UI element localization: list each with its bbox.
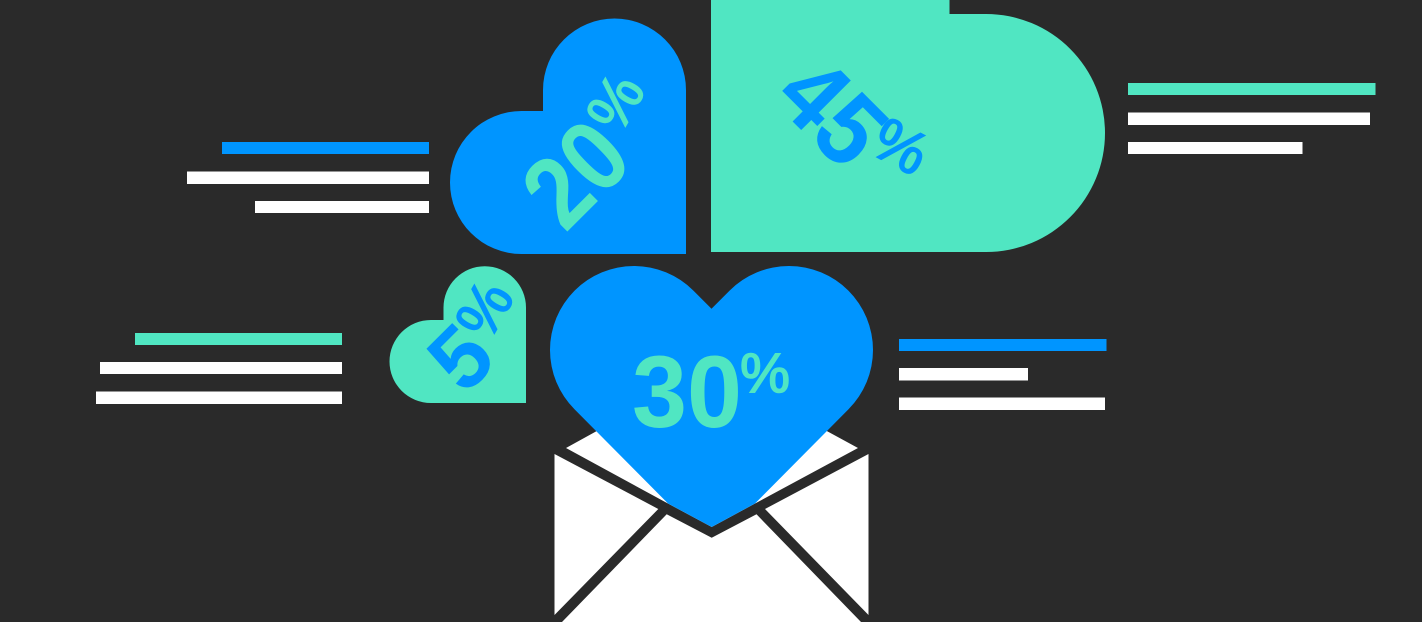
panel: 20 percent heart: % xyxy=(573,62,658,142)
panel: 20 percent heart: 20 xyxy=(500,98,651,249)
panel: 45 percent shape xyxy=(711,0,1105,252)
text block: 45 percent placeholder lines xyxy=(1128,83,1376,154)
panel: 30 percent heart: % xyxy=(740,341,790,404)
panel: 5 percent heart: 5 xyxy=(408,305,513,410)
icon: envelope xyxy=(554,368,868,622)
panel: 5 percent heart: % xyxy=(442,269,527,349)
panel: 45 percent shape: % xyxy=(861,104,940,189)
text block: 30 percent placeholder lines xyxy=(899,339,1106,410)
panel: 5 percent heart xyxy=(390,266,527,410)
panel: 30 percent heart xyxy=(550,266,873,527)
panel: 20 percent heart xyxy=(450,19,686,254)
panel: 30 percent heart: 30 xyxy=(632,335,742,449)
text block: 5 percent placeholder lines xyxy=(96,333,342,404)
panel: 45 percent shape: 45 xyxy=(756,35,909,188)
text block: 20 percent placeholder lines xyxy=(187,142,429,213)
